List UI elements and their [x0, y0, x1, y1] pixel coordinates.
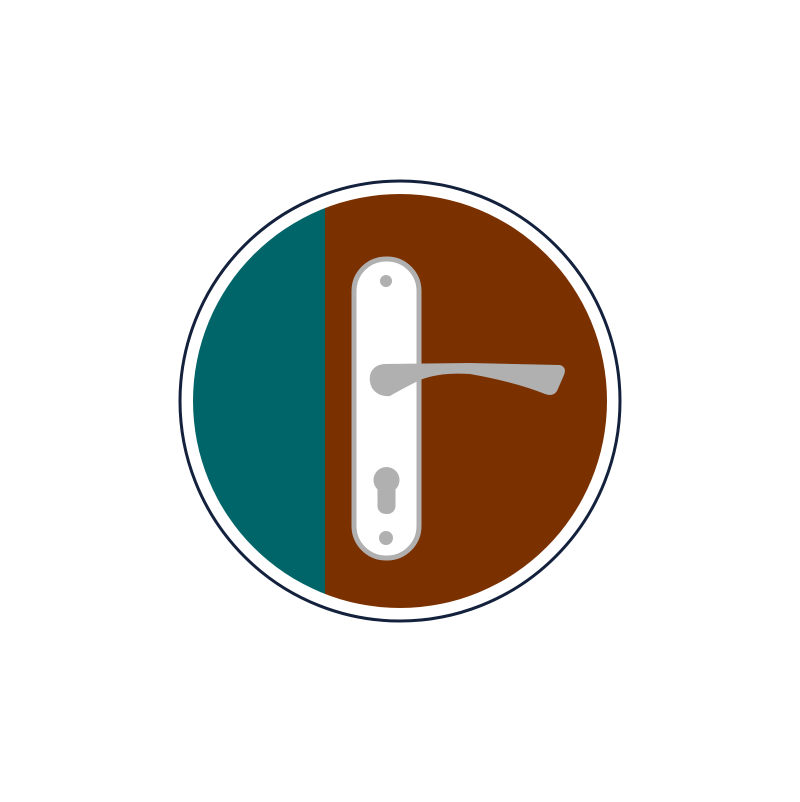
door halves [193, 194, 607, 608]
icon: door handle badge [180, 180, 625, 630]
lever handle [370, 363, 565, 396]
keyhole [374, 467, 400, 493]
handle backplate [354, 259, 419, 558]
outer ring [180, 181, 620, 621]
